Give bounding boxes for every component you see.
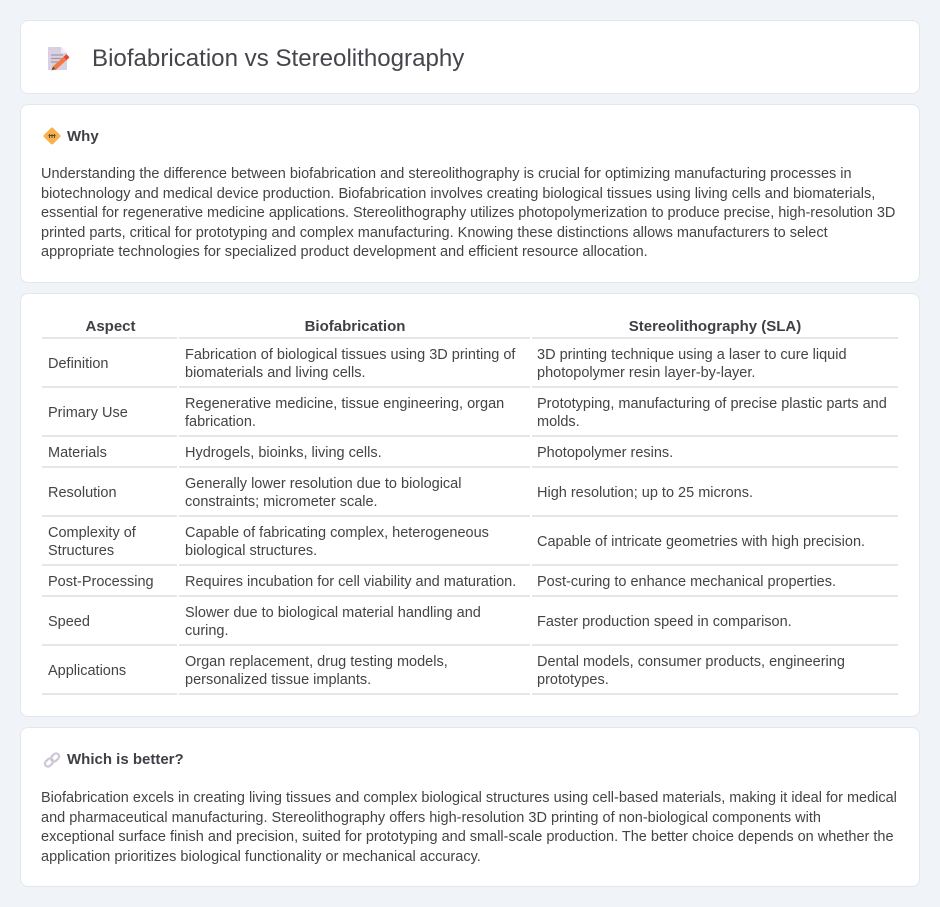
row: materials: Photopolymer resins. — [537, 445, 673, 461]
row: primary use: Regenerative medicine, tissue engineering, organ — [185, 396, 504, 412]
row: applications: Dental models, consumer products, engineering — [537, 654, 845, 670]
text block: why: biotechnology and medical device production. Biofabrication involves creating biological tissues using living cells and biomaterials, — [41, 186, 875, 202]
text block: which is better: and pharmaceutical manufacturing. Stereolithography offers high-resolution 3D printing of non-biological components with — [41, 810, 821, 826]
row: definition: Definition — [48, 356, 108, 372]
row: applications: Organ replacement, drug testing models, — [185, 654, 448, 670]
text block: why — [41, 166, 895, 260]
panel: comparison table — [20, 293, 920, 717]
row: primary use: Prototyping, manufacturing of precise plastic parts and — [537, 396, 887, 412]
row: definition: 3D printing technique using a laser to cure liquid — [537, 347, 847, 363]
text block: why: essential for regenerative medicine applications. Stereolithography utilizes photopolymerization to produce precise, high-resolution 3D — [41, 205, 895, 221]
panel: title — [20, 20, 920, 94]
row: primary use — [48, 396, 887, 430]
icon: link — [44, 752, 60, 768]
table header: Stereolithography (SLA) — [629, 318, 801, 335]
row: post-processing: Post-curing to enhance mechanical properties. — [537, 574, 836, 590]
row: speed: Speed — [48, 614, 90, 630]
row: primary use: molds. — [537, 414, 580, 430]
row: materials — [48, 445, 673, 461]
row: complexity of structures: Capable of fabricating complex, heterogeneous — [185, 525, 489, 541]
text block: which is better — [41, 790, 897, 865]
table header: Biofabrication — [305, 318, 405, 335]
title text: Biofabrication vs Stereolithography — [92, 45, 464, 72]
panel: which is better — [20, 727, 920, 887]
row: materials: Materials — [48, 445, 107, 461]
row: post-processing: Requires incubation for cell viability and maturation. — [185, 574, 516, 590]
row: speed: Slower due to biological material handling and — [185, 605, 481, 621]
row: resolution: Generally lower resolution due to biological — [185, 476, 461, 492]
row: speed: Faster production speed in comparison. — [537, 614, 792, 630]
table header: Aspect — [85, 318, 136, 335]
text block: why: Understanding the difference between biofabrication and stereolithography is crucial for optimizing manufacturing processes in — [41, 166, 852, 182]
row: complexity of structures: Capable of intricate geometries with high precision. — [537, 534, 865, 550]
row: definition: biomaterials and living cells. — [185, 365, 366, 381]
row: primary use: fabrication. — [185, 414, 256, 430]
row: applications: Applications — [48, 663, 126, 679]
row: speed: curing. — [185, 623, 229, 639]
text block: which is better: Biofabrication excels in creating living tissues and complex biological structures using cell-based materials, making it ideal for medical — [41, 790, 897, 806]
row: applications: prototypes. — [537, 672, 609, 688]
row: complexity of structures: Structures — [48, 543, 114, 559]
row: resolution: Resolution — [48, 485, 117, 501]
row: definition: photopolymer resin layer-by-layer. — [537, 365, 755, 381]
row: applications: personalized tissue implants. — [185, 672, 371, 688]
row: materials: Hydrogels, bioinks, living cells. — [185, 445, 382, 461]
text block: which is better: exceptional surface finish and precision, suited for prototyping and small-scale production. The better choice depends on whether the — [41, 829, 894, 845]
row: applications — [48, 654, 845, 688]
row: post-processing — [48, 574, 836, 590]
row: definition: Fabrication of biological tissues using 3D printing of — [185, 347, 515, 363]
row: complexity of structures: biological structures. — [185, 543, 317, 559]
table header — [85, 318, 801, 335]
row: resolution: High resolution; up to 25 microns. — [537, 485, 753, 501]
row: complexity of structures — [48, 525, 865, 559]
row: resolution: constraints; micrometer scale. — [185, 494, 378, 510]
text block: why: printed parts, critical for prototyping and complex manufacturing. Knowing these distinctions allows manufacturers to select — [41, 225, 828, 241]
panel: why — [20, 104, 920, 283]
icon: warning diamond — [44, 128, 60, 144]
heading: which is better: Which is better? — [67, 751, 184, 768]
text block: which is better: application prioritizes biological functionality or mechanical accuracy. — [41, 849, 481, 865]
row: definition — [48, 347, 847, 381]
icon: memo with pencil — [48, 47, 70, 70]
heading: why: Why — [67, 128, 99, 145]
row: post-processing: Post-Processing — [48, 574, 154, 590]
row: speed — [48, 605, 792, 639]
comparison table — [42, 318, 898, 695]
row: primary use: Primary Use — [48, 405, 128, 421]
row: resolution — [48, 476, 753, 510]
text block: why: appropriate technologies for specialized product development and efficient resource allocation. — [41, 244, 648, 260]
row: complexity of structures: Complexity of — [48, 525, 136, 541]
